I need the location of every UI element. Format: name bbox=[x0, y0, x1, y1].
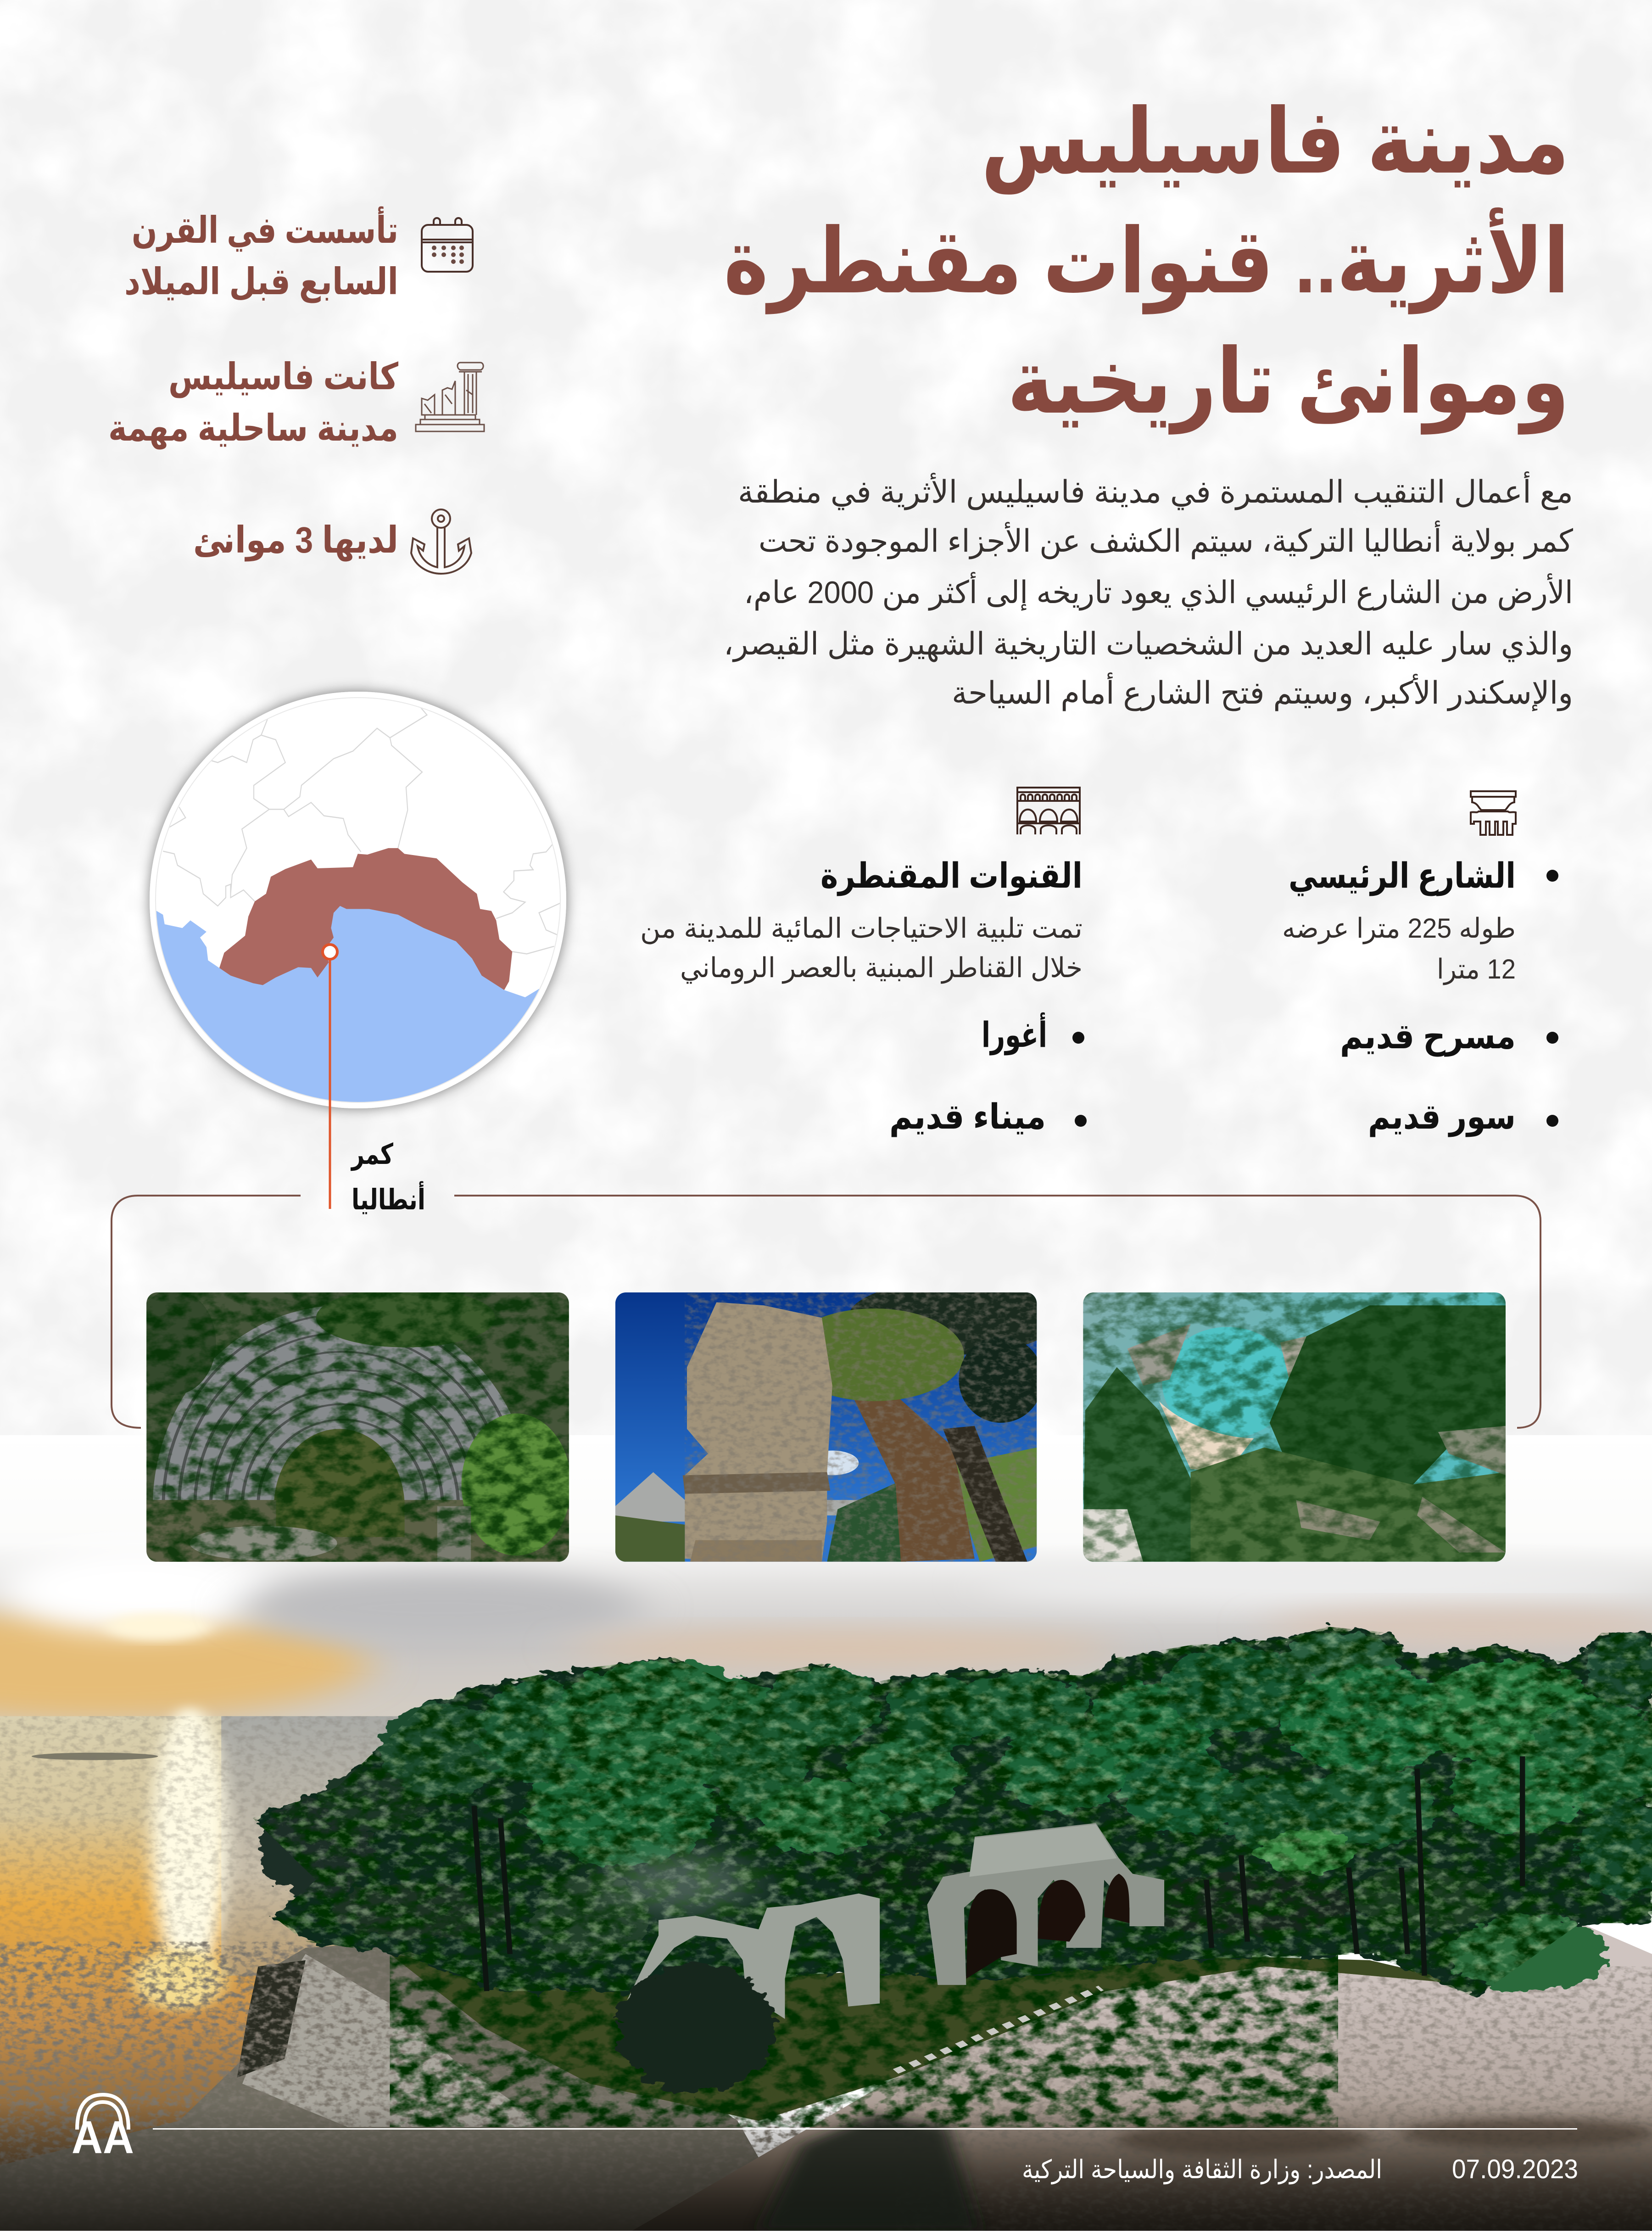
fact: founded in the seventh century BC: تأسست في القرن bbox=[132, 207, 398, 252]
fact: three ports bbox=[193, 509, 471, 574]
bottom dark vignette bbox=[0, 2102, 1652, 2231]
fact: important coastal city bbox=[108, 356, 484, 450]
footer: date: 07.09.2023 bbox=[1452, 2154, 1578, 2184]
logo: Anadolu Agency: AA bbox=[72, 2112, 134, 2163]
fact: founded in the seventh century BC: السابع قبل الميلاد bbox=[124, 261, 398, 303]
icon: ruined columns bbox=[416, 363, 484, 431]
map label: Kemer, Antalya bbox=[351, 1139, 425, 1216]
fact: three ports: لديها 3 موانئ bbox=[193, 520, 398, 562]
intro paragraph: والذي سار عليه العديد من الشخصيات التاريخية الشهيرة مثل القيصر، bbox=[724, 626, 1573, 662]
item: ancient theatre: مسرح قديم bbox=[1340, 1017, 1516, 1057]
intro paragraph bbox=[724, 471, 1574, 711]
background photo: Phaselis aqueduct at sunset bbox=[0, 1435, 1652, 2231]
item: main street: 12 مترا bbox=[1437, 954, 1516, 985]
item: agora: أغورا bbox=[982, 1012, 1047, 1056]
map label: Kemer, Antalya: كمر bbox=[351, 1139, 394, 1171]
footer rule bbox=[153, 2128, 1577, 2130]
aqueduct left section bbox=[616, 1894, 880, 2093]
intro paragraph: والإسكندر الأكبر، وسيتم فتح الشارع أمام السياحة bbox=[952, 672, 1573, 711]
map: Antalya locator circle bbox=[115, 692, 620, 1198]
icon: aqueduct bbox=[1016, 788, 1081, 834]
neighbouring province borders bbox=[163, 707, 560, 954]
fact: founded in the seventh century BC bbox=[124, 207, 473, 303]
item: ancient port: ميناء قديم bbox=[889, 1097, 1046, 1137]
intro paragraph: الأرض من الشارع الرئيسي الذي يعود تاريخه إلى أكثر من 2000 عام، bbox=[744, 572, 1573, 611]
item: aqueducts bbox=[640, 856, 1083, 984]
photo: aqueduct arch against blue sky bbox=[615, 1280, 1059, 1562]
sky bbox=[0, 1547, 1652, 1725]
boundary stones bbox=[896, 1988, 1101, 2071]
footer: source: المصدر: وزارة الثقافة والسياحة التركية bbox=[1022, 2155, 1382, 2185]
title: وموانئ تاريخية bbox=[1007, 331, 1569, 435]
title bbox=[724, 91, 1569, 435]
map label: Kemer, Antalya: أنطاليا bbox=[352, 1181, 425, 1216]
frame around photos bbox=[112, 1196, 1540, 1428]
grass under trees bbox=[390, 1948, 1475, 2127]
item: main street bbox=[1282, 856, 1558, 985]
item: aqueducts: خلال القناطر المبنية بالعصر الروماني bbox=[680, 952, 1083, 984]
sea with sun reflection bbox=[0, 1702, 398, 2165]
item: ancient wall: سور قديم bbox=[1368, 1097, 1516, 1137]
fact: important coastal city: كانت فاسيليس bbox=[168, 356, 398, 398]
item: aqueducts: تمت تلبية الاحتياجات المائية للمدينة من bbox=[640, 913, 1083, 945]
map pin and leader line bbox=[323, 945, 337, 1209]
title: مدينة فاسيليس bbox=[981, 91, 1569, 195]
icon: column capital bbox=[1471, 791, 1516, 835]
intro paragraph: كمر بولاية أنطاليا التركية، سيتم الكشف عن الأجزاء الموجودة تحت bbox=[759, 520, 1574, 559]
beach bbox=[632, 1923, 1652, 2231]
item: aqueducts: القنوات المقنطرة bbox=[820, 856, 1083, 896]
sea bbox=[115, 894, 620, 1198]
aqueduct right section bbox=[927, 1823, 1164, 1985]
Antalya province bbox=[219, 848, 512, 990]
icon: calendar bbox=[422, 218, 473, 272]
intro paragraph: مع أعمال التنقيب المستمرة في مدينة فاسيليس الأثرية في منطقة bbox=[738, 471, 1573, 510]
fact: important coastal city: مدينة ساحلية مهمة bbox=[108, 408, 398, 450]
item: main street: طوله 225 مترا عرضه bbox=[1282, 913, 1516, 945]
list column: main street, theatre, wall bbox=[1282, 856, 1558, 1137]
left shore bbox=[0, 1942, 843, 2231]
list column: aqueducts, agora, port bbox=[640, 856, 1087, 1137]
photo: ancient theatre bbox=[132, 1288, 571, 1707]
forest canopy bbox=[253, 1627, 1652, 1997]
icon: anchor bbox=[411, 509, 471, 574]
photo: aerial view of harbour bbox=[1083, 1292, 1506, 1562]
item: main street: الشارع الرئيسي bbox=[1289, 856, 1516, 896]
